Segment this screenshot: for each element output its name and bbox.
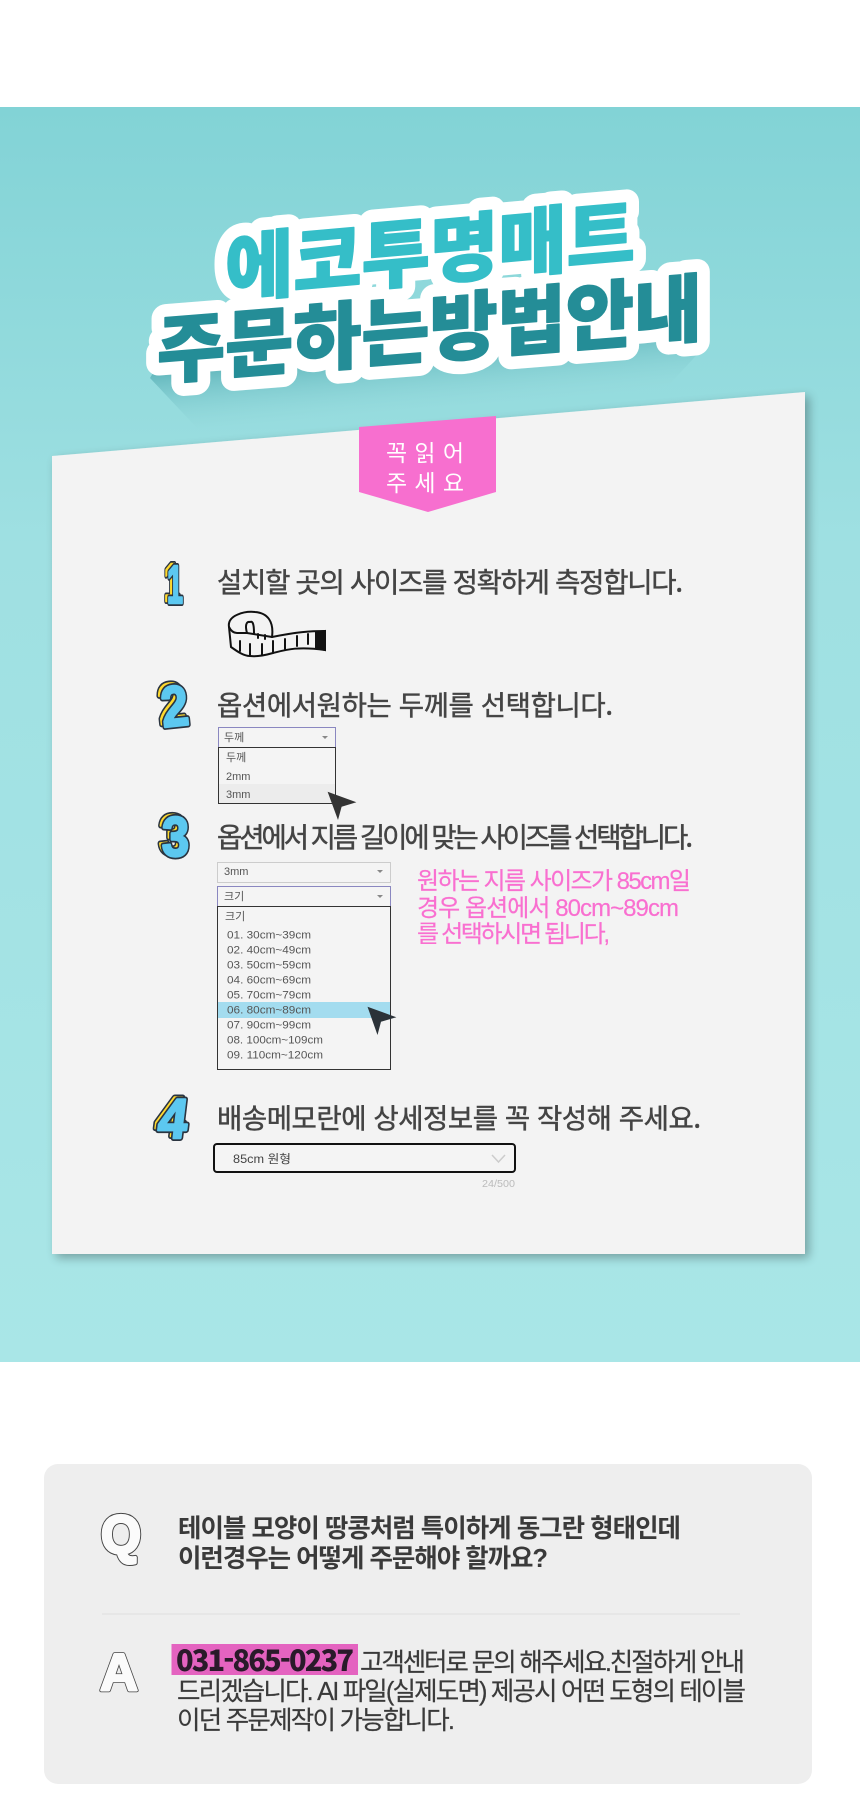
icon: number 1: 1 bbox=[167, 555, 183, 615]
icon: number 4: 4 bbox=[152, 1085, 189, 1148]
badge: read carefully ribbon: 꼭 읽 어 bbox=[386, 434, 464, 468]
icon: number 2: 2 bbox=[158, 674, 191, 740]
icon: Q: Q bbox=[101, 1505, 141, 1565]
title: 에코투명매트 bbox=[225, 175, 635, 318]
size dropdowns: 02. 40cm~49cm bbox=[227, 944, 311, 956]
answer text bbox=[177, 1649, 746, 1735]
icon: Q: Q bbox=[101, 1505, 141, 1565]
icon: number 2: 2 bbox=[155, 671, 188, 737]
icon: number 1 bbox=[164, 553, 183, 615]
answer text: 고객센터로 문의 해주세요.친절하게 안내 bbox=[360, 1649, 745, 1677]
size dropdowns: 05. 70cm~79cm bbox=[227, 990, 311, 1002]
pink note: 를 선택하시면 됩니다, bbox=[417, 921, 610, 948]
memo input: 24/500 bbox=[482, 1178, 515, 1190]
icon: A: A bbox=[100, 1644, 138, 1702]
size dropdowns: 01. 30cm~39cm bbox=[227, 930, 311, 942]
size dropdowns: 09. 110cm~120cm bbox=[227, 1050, 323, 1062]
icon: measuring tape bbox=[229, 612, 325, 656]
panel: instructions card bbox=[52, 392, 805, 1254]
memo input bbox=[214, 1144, 515, 1190]
size dropdowns: 03. 50cm~59cm bbox=[227, 960, 311, 972]
size dropdowns bbox=[218, 862, 390, 1070]
size dropdowns: 07. 90cm~99cm bbox=[227, 1020, 311, 1032]
icon: cursor arrow bbox=[328, 792, 356, 820]
question text: 테이블 모양이 땅콩처럼 특이하게 동그란 형태인데 bbox=[178, 1515, 681, 1543]
title: 주문하는방법안내 bbox=[157, 250, 702, 399]
size dropdowns: 크기 bbox=[225, 908, 245, 924]
panel: Q and A bbox=[44, 1464, 812, 1784]
icon: number 3: 3 bbox=[159, 803, 186, 866]
icon: number 1: 1 bbox=[164, 553, 180, 613]
badge: read carefully ribbon bbox=[359, 416, 496, 512]
pink note bbox=[417, 868, 691, 948]
step 3 bbox=[159, 803, 693, 1070]
icon: number 3: 3 bbox=[162, 805, 189, 868]
badge: read carefully ribbon: 주 세 요 bbox=[386, 464, 464, 498]
title: 에코투명매트 bbox=[225, 175, 635, 318]
title: 주문하는방법안내 bbox=[157, 250, 702, 399]
panel: teal background bbox=[0, 107, 860, 1362]
size dropdowns: 04. 60cm~69cm bbox=[227, 974, 311, 986]
step 2 bbox=[155, 671, 613, 820]
icon: number 3: 3 bbox=[162, 805, 189, 868]
icon: cursor arrow bbox=[368, 1007, 396, 1035]
title bbox=[157, 175, 702, 399]
size dropdowns: 08. 100cm~109cm bbox=[227, 1034, 323, 1046]
thickness dropdown: 두께 bbox=[224, 729, 244, 745]
icon: number 1: 1 bbox=[164, 553, 180, 613]
thickness dropdown: 2mm bbox=[226, 771, 250, 783]
icon: number 1: 1 bbox=[167, 555, 183, 615]
thickness dropdown: 두께 bbox=[226, 749, 246, 765]
answer text: 드리겠습니다. AI 파일(실제도면) 제공시 어떤 도형의 테이블 bbox=[177, 1678, 746, 1706]
answer text: 이던 주문제작이 가능합니다. bbox=[177, 1707, 455, 1735]
icon: number 4: 4 bbox=[152, 1085, 189, 1148]
icon: number 4: 4 bbox=[155, 1087, 192, 1150]
step 2 text: 옵션에서원하는 두께를 선택합니다. bbox=[217, 683, 613, 723]
size dropdowns: 3mm bbox=[224, 866, 248, 878]
pink note: 경우 옵션에서 80cm~89cm bbox=[417, 895, 679, 922]
icon: A: A bbox=[100, 1644, 138, 1702]
memo input: 85cm 원형 bbox=[233, 1152, 291, 1166]
step 1 text: 설치할 곳의 사이즈를 정확하게 측정합니다. bbox=[217, 560, 683, 600]
title shadow bbox=[150, 332, 706, 428]
step 4 bbox=[152, 1085, 701, 1190]
icon: number 4: 4 bbox=[155, 1087, 192, 1150]
size dropdowns: 크기 bbox=[224, 888, 244, 904]
step 1 bbox=[164, 553, 683, 656]
phone highlight: 031-865-0237 bbox=[176, 1638, 354, 1680]
question text bbox=[178, 1515, 681, 1573]
icon: number 3: 3 bbox=[159, 803, 186, 866]
icon: number 2: 2 bbox=[155, 671, 188, 737]
size dropdowns: 06. 80cm~89cm bbox=[227, 1004, 311, 1016]
thickness dropdown: 3mm bbox=[226, 789, 250, 801]
step 3 text: 옵션에서 지름 길이에 맞는 사이즈를 선택합니다. bbox=[217, 815, 693, 855]
question text: 이런경우는 어떻게 주문해야 할까요? bbox=[178, 1545, 548, 1573]
step 4 text: 배송메모란에 상세정보를 꼭 작성해 주세요. bbox=[217, 1096, 701, 1136]
pink note: 원하는 지름 사이즈가 85cm일 bbox=[417, 868, 691, 895]
icon: number 2: 2 bbox=[158, 674, 191, 740]
thickness dropdown bbox=[218, 728, 336, 804]
